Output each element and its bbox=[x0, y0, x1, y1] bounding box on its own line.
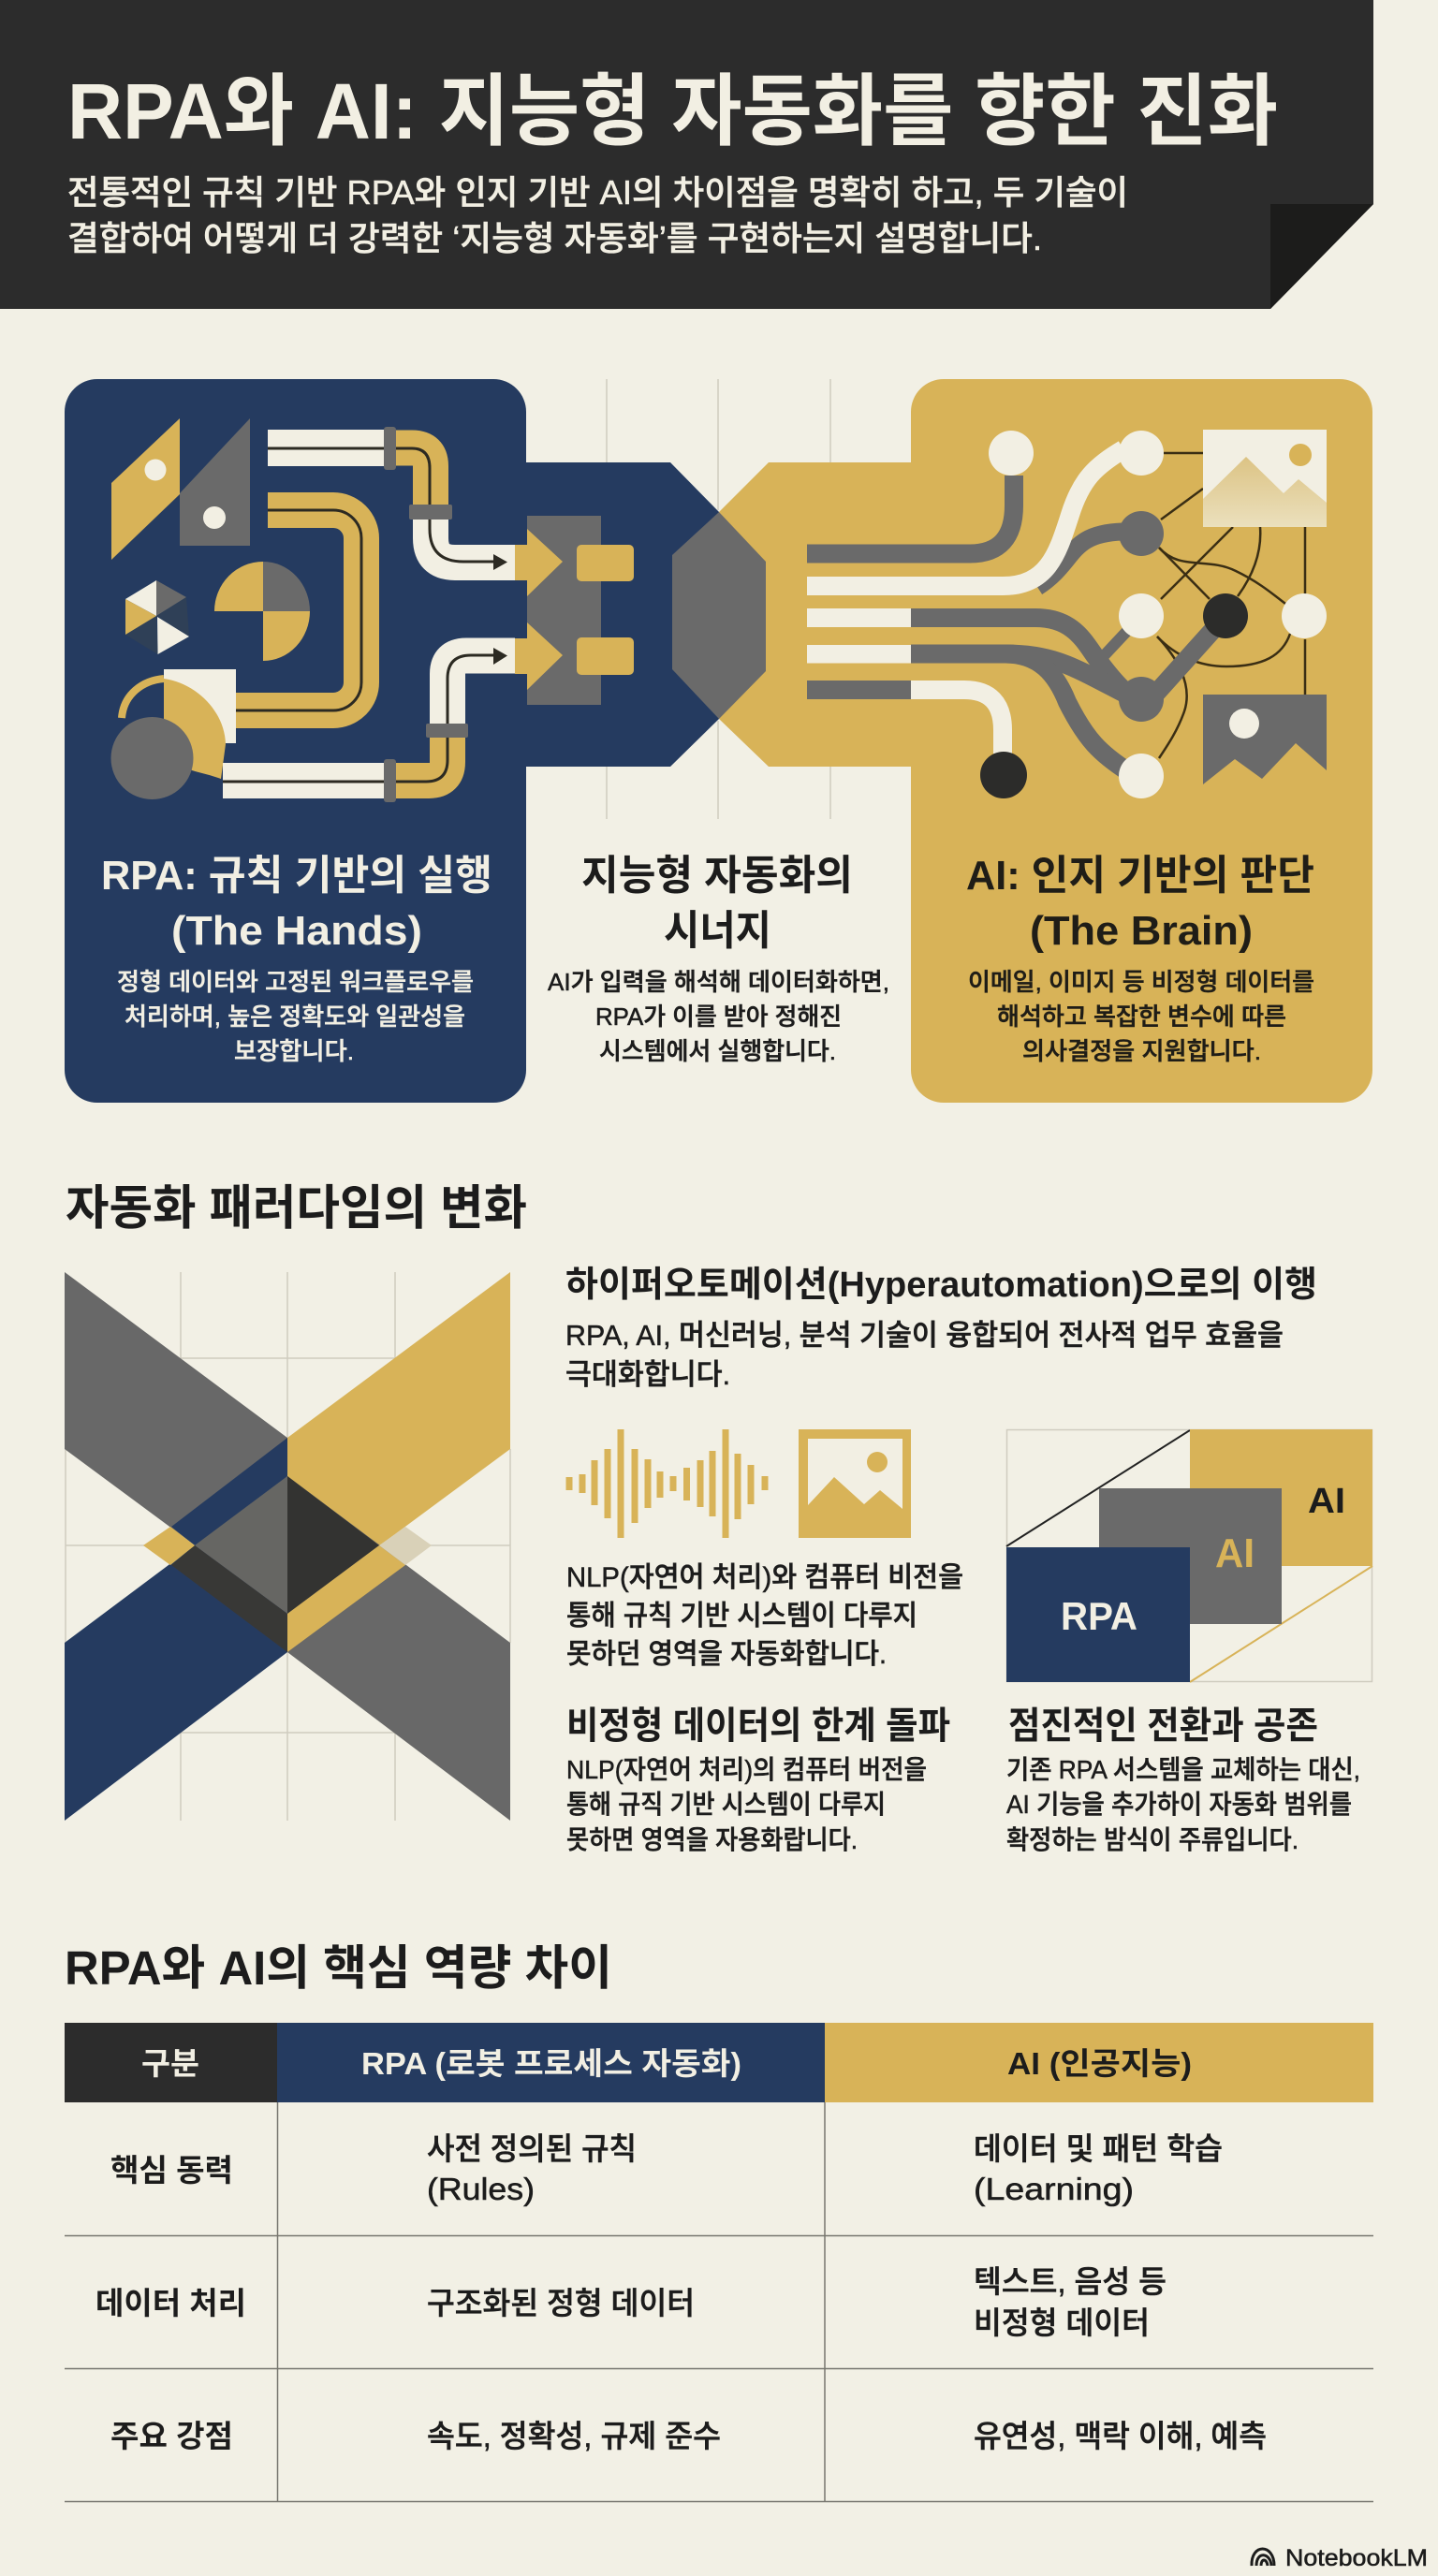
row: data handling: 구조화된 정형 데이터 bbox=[427, 2286, 695, 2320]
synergy description: AI가 입력을 해석해 데이터화하면, bbox=[548, 968, 889, 996]
row: core driver: 사전 정의된 규칙 bbox=[427, 2131, 637, 2166]
icon: cream square with gold quarter and grey circle bbox=[110, 669, 236, 799]
text: NLP and vision: NLP(자연어 처리)와 컴퓨터 비전을 bbox=[566, 1562, 963, 1593]
table header: RPA (로봇 프로세스 자동화) bbox=[361, 2046, 741, 2081]
chart: layered RPA to AI squares: AI bbox=[1215, 1530, 1255, 1576]
text: NLP and vision bbox=[566, 1562, 963, 1670]
synergy heading: 지능형 자동화의 bbox=[581, 853, 853, 899]
block: hyperautomation bbox=[565, 1266, 1317, 1391]
description bbox=[565, 1319, 1284, 1391]
description: 못하면 영역을 자용화랍니다. bbox=[566, 1825, 858, 1854]
heading: 하이퍼오토메이션(Hyperautomation)으로의 이행 bbox=[565, 1266, 1317, 1305]
section heading: capability difference: RPA와 AI의 핵심 역량 차이 bbox=[65, 1941, 612, 1995]
synergy heading bbox=[581, 853, 853, 954]
centre hexagon connector bbox=[672, 512, 766, 719]
description bbox=[1006, 1755, 1360, 1854]
row: data handling: 텍스트, 음성 등 bbox=[974, 2264, 1167, 2299]
RPA description bbox=[117, 968, 474, 1065]
network thin links bbox=[1157, 453, 1305, 758]
description: 통해 규직 기반 시스템이 다루지 bbox=[566, 1790, 886, 1819]
description: RPA, AI, 머신러닝, 분석 기술이 융합되어 전사적 업무 효율을 bbox=[565, 1319, 1284, 1352]
icon: grey trapezoid bbox=[180, 418, 250, 546]
table header: AI (인공지능) bbox=[1007, 2046, 1192, 2081]
AI description: 해석하고 복잡한 변수에 따른 bbox=[997, 1003, 1286, 1031]
synergy description bbox=[548, 968, 889, 1065]
subtitle: 결합하여 어떻게 더 강력한 ‘지능형 자동화’를 구현하는지 설명합니다. bbox=[67, 219, 1042, 257]
block: gradual transition bbox=[1006, 1705, 1360, 1854]
pipe: top conveyor with arrow bbox=[268, 427, 515, 570]
comparison table bbox=[65, 2023, 1373, 2501]
icon: quarter circles bbox=[214, 562, 310, 661]
pipe: bottom conveyor with arrow bbox=[223, 648, 515, 802]
table header bbox=[65, 2023, 1373, 2102]
row: core driver: (Learning) bbox=[974, 2172, 1134, 2206]
block: unstructured data bbox=[566, 1705, 950, 1854]
description: 기존 RPA 서스템을 교체하는 대신, bbox=[1006, 1755, 1360, 1784]
icon: sound waveform bbox=[565, 1429, 768, 1538]
processing block with gold arrows bbox=[515, 516, 634, 705]
row: main strength: 속도, 정확성, 규제 준수 bbox=[427, 2419, 721, 2453]
network nodes bbox=[980, 431, 1327, 798]
RPA description: 처리하며, 높은 정확도와 일관성을 bbox=[125, 1003, 465, 1031]
synergy description: RPA가 이를 받아 정해진 bbox=[595, 1003, 842, 1031]
header folded corner bbox=[1270, 204, 1373, 309]
row: main strength: 주요 강점 bbox=[110, 2419, 233, 2453]
synergy description: 시스템에서 실행합니다. bbox=[599, 1037, 836, 1065]
icon: flag bbox=[1203, 695, 1327, 784]
NotebookLM logo: NotebookLM bbox=[1285, 2545, 1428, 2571]
AI description: 의사결정을 지원합니다. bbox=[1022, 1037, 1261, 1065]
panel: AI the brain bbox=[719, 379, 1372, 1103]
icon: NotebookLM arches bbox=[1252, 2549, 1274, 2566]
description: 확정하는 밤식이 주류입니다. bbox=[1006, 1825, 1299, 1854]
subtitle bbox=[67, 173, 1128, 257]
AI description: 이메일, 이미지 등 비정형 데이터를 bbox=[968, 968, 1314, 996]
row: data handling bbox=[95, 2264, 1167, 2340]
row: data handling: 비정형 데이터 bbox=[974, 2305, 1150, 2340]
header banner bbox=[0, 0, 1373, 309]
pipe: long gold U bbox=[236, 510, 361, 710]
subtitle: 전통적인 규칙 기반 RPA와 인지 기반 AI의 차이점을 명확히 하고, 두 기술이 bbox=[67, 173, 1128, 212]
AI heading bbox=[966, 853, 1314, 954]
row: core driver: 핵심 동력 bbox=[110, 2153, 233, 2188]
row: core driver: 데이터 및 패턴 학습 bbox=[974, 2131, 1223, 2166]
row: main strength bbox=[110, 2419, 1267, 2453]
row: data handling: 데이터 처리 bbox=[95, 2286, 246, 2320]
RPA heading: (The Hands) bbox=[171, 908, 422, 954]
chart: layered RPA to AI squares: RPA bbox=[1061, 1594, 1137, 1638]
table header: 구분 bbox=[141, 2046, 199, 2081]
pipe stubs bbox=[807, 608, 911, 699]
RPA heading: RPA: 규칙 기반의 실행 bbox=[101, 853, 492, 899]
row: main strength: 유연성, 맥락 이해, 예측 bbox=[974, 2419, 1267, 2453]
row: core driver: (Rules) bbox=[427, 2172, 535, 2206]
heading: 비정형 데이터의 한계 돌파 bbox=[566, 1705, 950, 1747]
section heading: paradigm shift: 자동화 패러다임의 변화 bbox=[66, 1181, 527, 1235]
row: core driver bbox=[110, 2131, 1223, 2206]
description: 극대화합니다. bbox=[565, 1358, 730, 1391]
chart: crossing X diagram bbox=[65, 1272, 510, 1821]
text: NLP and vision: 못하던 영역을 자동화합니다. bbox=[566, 1639, 887, 1670]
description: AI 기능을 추가하이 자동화 범위를 bbox=[1006, 1790, 1352, 1819]
icon: pinwheel hexagon bbox=[125, 580, 189, 654]
text: NLP and vision: 통해 규칙 기반 시스템이 다루지 bbox=[566, 1601, 917, 1632]
synergy heading: 시너지 bbox=[664, 908, 771, 954]
description: NLP(자연어 처리)의 컴퓨터 버전을 bbox=[566, 1755, 927, 1784]
AI heading: AI: 인지 기반의 판단 bbox=[966, 853, 1314, 899]
chart: layered RPA to AI squares: AI bbox=[1308, 1482, 1345, 1521]
RPA description: 정형 데이터와 고정된 워크플로우를 bbox=[117, 968, 474, 996]
RPA description: 보장합니다. bbox=[234, 1037, 354, 1065]
AI heading: (The Brain) bbox=[1030, 908, 1253, 954]
icon: gold parallelogram bbox=[111, 418, 180, 560]
pipes: grey and cream circuit bbox=[807, 449, 1225, 772]
chart: layered RPA to AI squares bbox=[1006, 1429, 1372, 1682]
title: RPA와 AI: 지능형 자동화를 향한 진화 bbox=[67, 67, 1278, 155]
RPA heading bbox=[101, 853, 492, 954]
synergy text block bbox=[548, 853, 889, 1065]
icon: picture frame bbox=[799, 1429, 911, 1538]
panel: RPA the hands bbox=[65, 379, 719, 1103]
heading: 점진적인 전환과 공존 bbox=[1008, 1705, 1318, 1747]
description bbox=[566, 1755, 927, 1854]
AI description bbox=[968, 968, 1314, 1065]
icon: image bbox=[1203, 430, 1327, 527]
